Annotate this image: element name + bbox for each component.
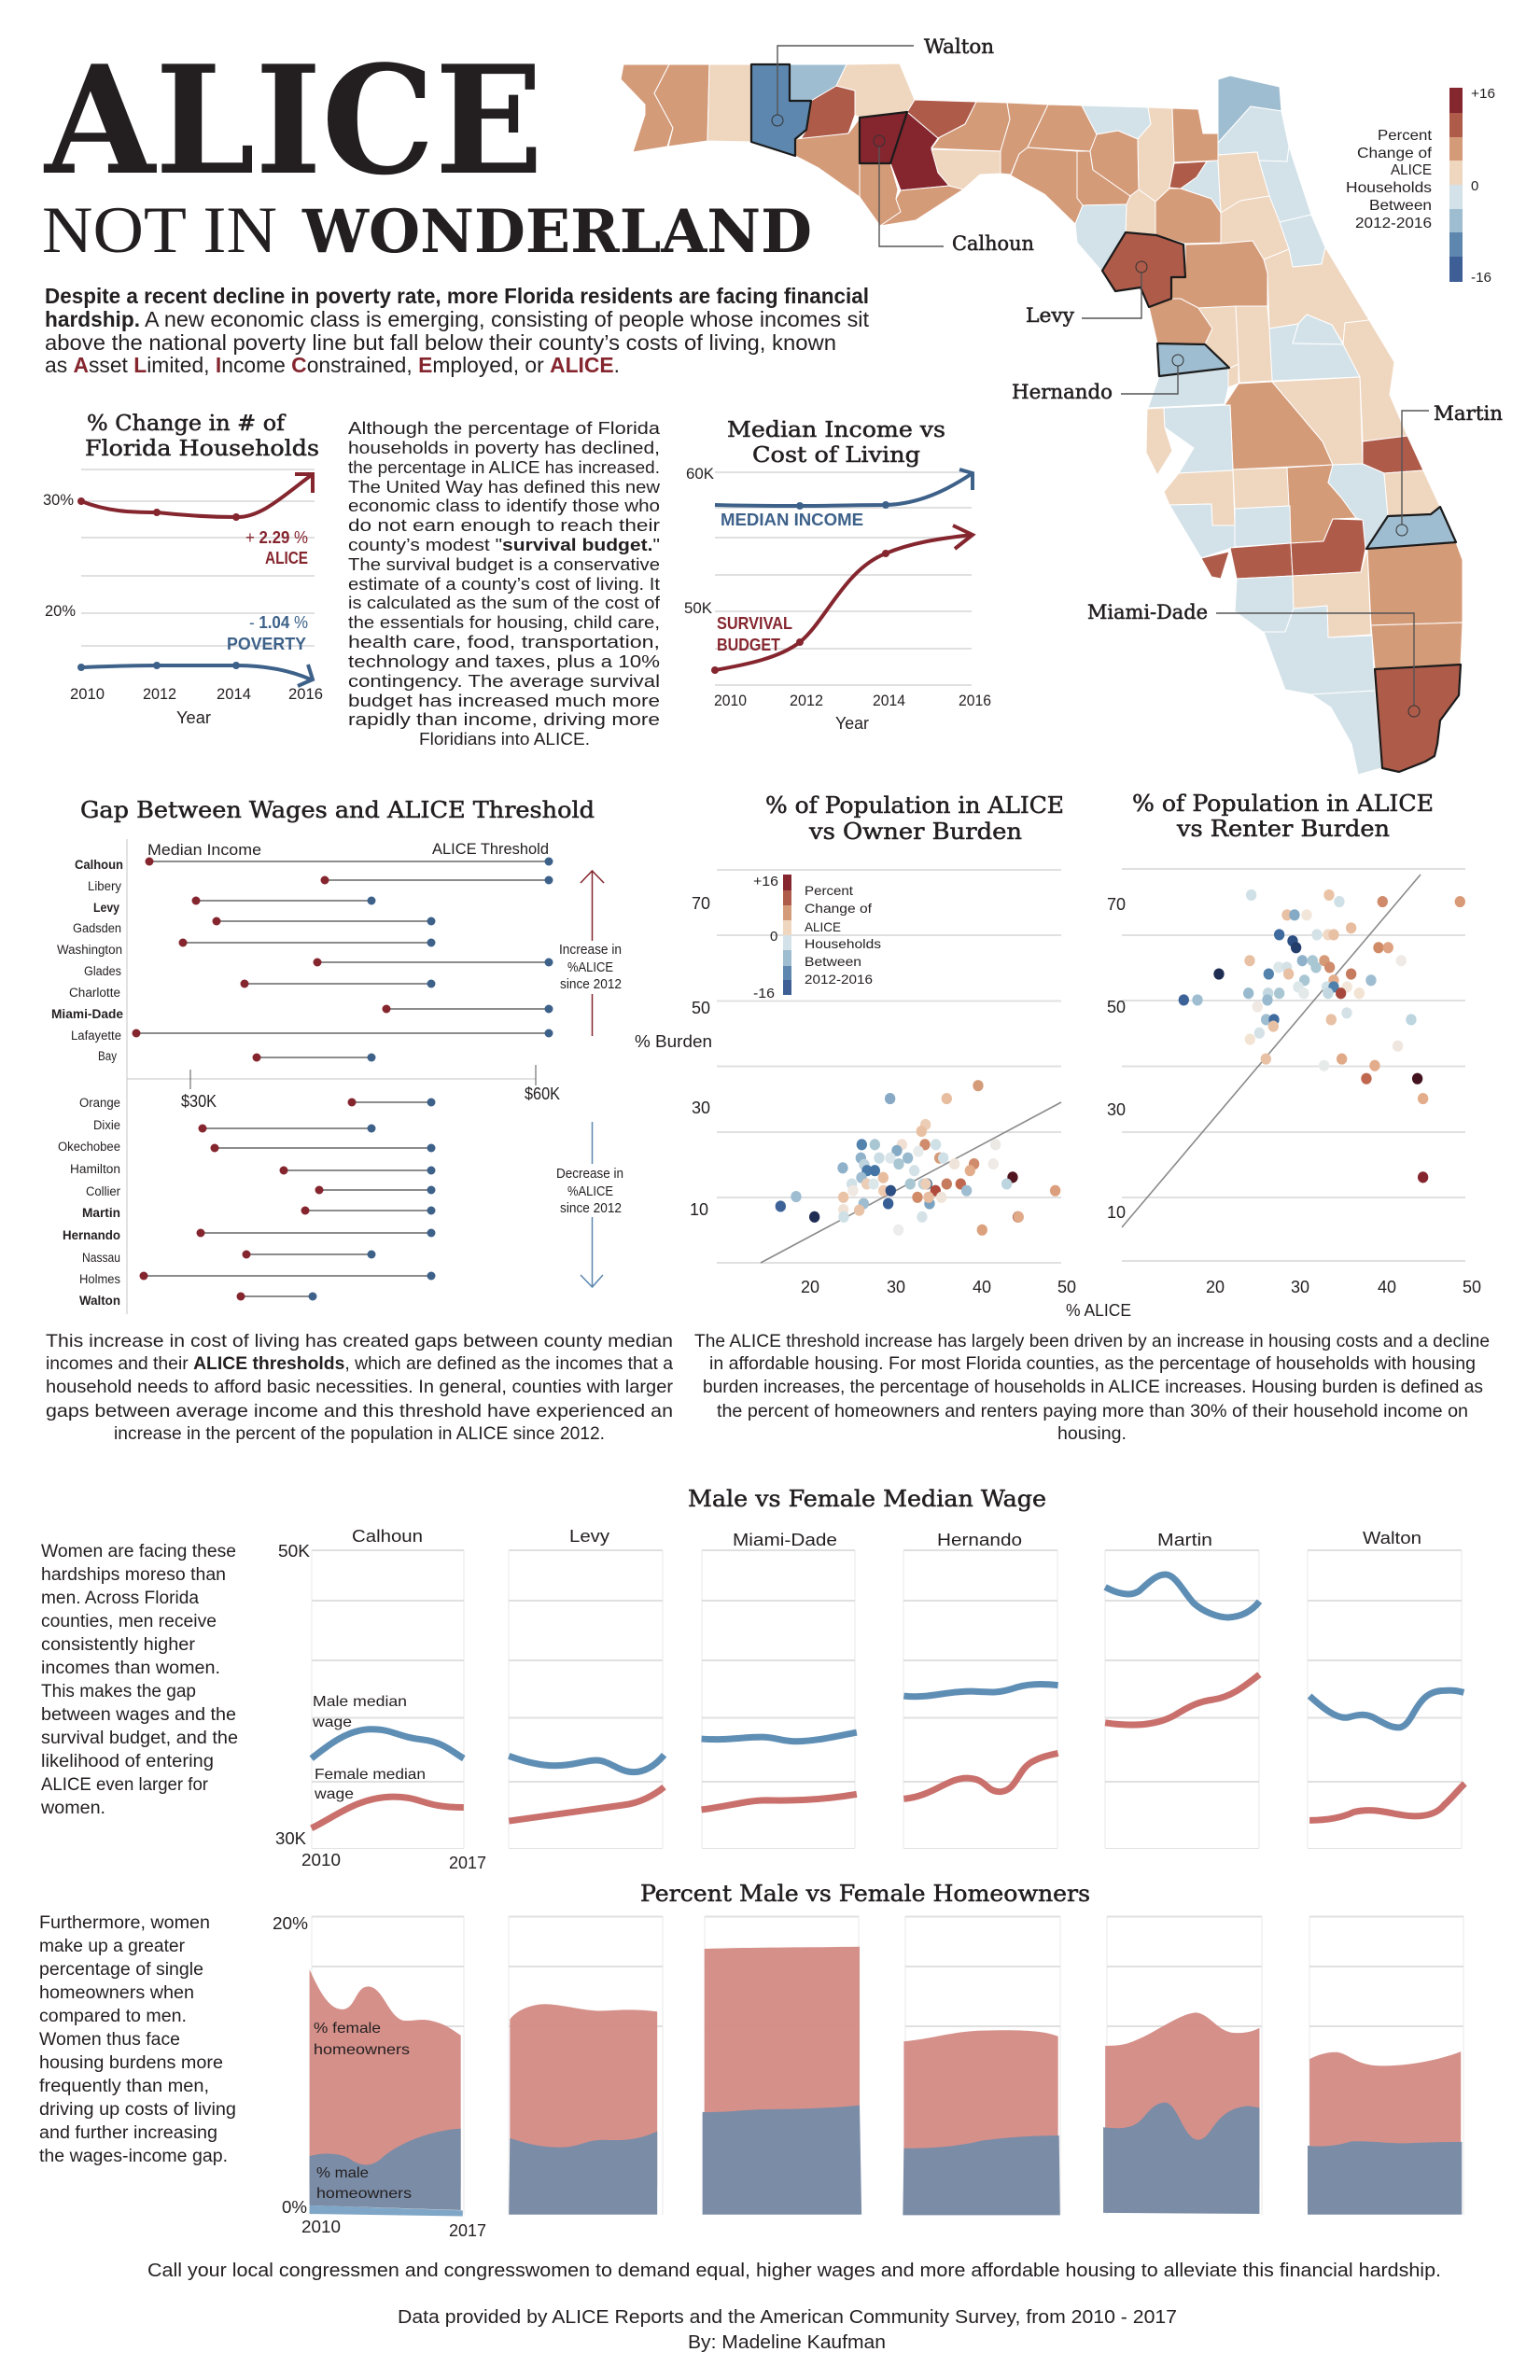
- text block: survival budget explanation: Although the percentage of Florida: [348, 418, 661, 438]
- county labels: Levy: [93, 901, 119, 915]
- text block: women facing hardships: between wages and the: [41, 1705, 236, 1725]
- panel: median income vs cost of living chart: Year: [835, 714, 869, 733]
- axis labels: 20%: [273, 1914, 308, 1933]
- arrow: increase in ALICE: [559, 871, 622, 1036]
- annotation: percent male homeowners: % male: [316, 2165, 369, 2181]
- heading: change in households: [85, 412, 319, 461]
- arrow: increase in ALICE: %ALICE: [567, 959, 613, 975]
- label: survival budget: BUDGET: [717, 636, 780, 654]
- county titles: [352, 1527, 1421, 1549]
- panel: change in households chart: 2014: [217, 685, 251, 703]
- annotation: percent male homeowners: homeowners: [316, 2186, 412, 2202]
- label: median income: MEDIAN INCOME: [721, 511, 863, 529]
- county labels: Bay: [98, 1049, 117, 1063]
- callout: Miami-Dade: Miami-Dade: [1087, 601, 1208, 623]
- intro text block: [45, 284, 870, 377]
- panel: median income vs cost of living chart: 60K: [686, 465, 715, 483]
- text block: women homeowners: Furthermore, women: [39, 1913, 210, 1933]
- county labels: Martin: [82, 1206, 120, 1220]
- title: WONDERLAND: [301, 197, 812, 267]
- heading: median income vs cost of living: [727, 418, 945, 468]
- callout: Calhoun: Calhoun: [952, 232, 1034, 255]
- label: poverty change: [227, 613, 308, 653]
- legend: map colour scale: ALICE: [1391, 162, 1432, 178]
- text block: women facing hardships: incomes than women.: [41, 1659, 220, 1678]
- text block: women facing hardships: consistently higher: [41, 1635, 196, 1655]
- text block: wage gap explanation: increase in the percent of the population in ALICE since 2012.: [114, 1423, 605, 1444]
- county labels: Libery: [88, 879, 121, 893]
- legend: map colour scale: Percent: [1378, 128, 1433, 144]
- dumbbells: counties with increase: [133, 857, 553, 1062]
- text block: survival budget explanation: estimate of a county’s cost of living. It: [348, 574, 660, 594]
- legend: map colour scale: [1346, 86, 1495, 286]
- panel: change in households chart: 20%: [45, 602, 76, 620]
- annotation: female median wage: wage: [314, 1786, 354, 1802]
- line: ALICE share: [79, 474, 313, 519]
- label: poverty change: - 1.04 %: [249, 613, 308, 632]
- heading: owner burden: % of Population in ALICE: [765, 792, 1064, 819]
- county labels: Okechobee: [58, 1140, 120, 1154]
- panel: gap between wages and threshold dumbbell chart: $30K: [181, 1092, 217, 1111]
- wage lines: [312, 1575, 1464, 1828]
- county labels: Miami-Dade: [51, 1007, 123, 1021]
- intro text block: A new economic class is emerging, consisting of people whose incomes sit: [145, 307, 870, 331]
- text block: wage gap explanation: [46, 1331, 674, 1444]
- annotation: percent female homeowners: [314, 2021, 410, 2058]
- text block: housing burden explanation: the percent of homeowners and renters paying more than 30% of their household income on: [717, 1401, 1468, 1421]
- county titles: Miami-Dade: [733, 1531, 837, 1549]
- scatter points: owner burden: [776, 1080, 1060, 1236]
- panel: homeowner area small multiples: [273, 1914, 1463, 2240]
- text block: survival budget explanation: Floridians into ALICE.: [419, 729, 590, 749]
- panel: owner burden scatter plot: 10: [690, 1200, 708, 1219]
- footer: call to action: Call your local congressmen and congresswomen to demand equal, higher wages and more affordable housing to alleviate this financial hardship.: [147, 2261, 1441, 2281]
- panel: owner burden scatter plot: 50: [1057, 1278, 1076, 1296]
- panel: owner burden scatter plot: 20: [801, 1278, 819, 1296]
- title: NOT IN: [42, 194, 277, 267]
- text block: wage gap explanation: household needs to afford basic necessities. In general, counties with larger: [46, 1377, 674, 1397]
- line: median income: [715, 469, 973, 508]
- axis labels: [275, 1542, 486, 1872]
- legend: map colour scale: Households: [1346, 180, 1432, 196]
- legend: scatter colour scale: 2012-2016: [805, 972, 873, 987]
- county labels: Collier: [86, 1184, 120, 1198]
- panel: renter burden scatter plot: 30: [1291, 1278, 1309, 1296]
- text block: women facing hardships: This makes the gap: [41, 1682, 196, 1701]
- text block: wage gap explanation: This increase in cost of living has created gaps between county median: [46, 1331, 673, 1351]
- county labels: Dixie: [93, 1118, 120, 1132]
- heading: renter burden: [1132, 791, 1434, 842]
- text block: women facing hardships: [40, 1542, 238, 1818]
- panel: gap between wages and threshold dumbbell chart: $60K: [525, 1085, 560, 1103]
- county labels: Glades: [84, 964, 121, 978]
- panel: renter burden scatter plot: 20: [1206, 1278, 1225, 1296]
- text block: survival budget explanation: budget has increased much more: [348, 691, 660, 710]
- title: ALICE: [43, 33, 543, 208]
- panel: owner burden scatter plot: 50: [692, 999, 710, 1017]
- text block: women homeowners: Women thus face: [39, 2030, 180, 2050]
- text block: survival budget explanation: households in poverty has declined,: [348, 438, 660, 457]
- panel: gap between wages and threshold dumbbell chart: Median Income: [147, 841, 261, 859]
- text block: housing burden explanation: in affordable housing. For most Florida counties, as the percentage of households with housing: [709, 1353, 1476, 1374]
- panel: change in households chart: 2016: [288, 685, 323, 703]
- annotation: male median wage: wage: [312, 1715, 352, 1730]
- panel: owner burden scatter plot: 30: [887, 1278, 905, 1296]
- panel: owner burden scatter plot: 30: [692, 1099, 710, 1117]
- text block: women facing hardships: likelihood of entering: [41, 1752, 214, 1771]
- text block: women facing hardships: men. Across Florida: [41, 1589, 199, 1608]
- annotation: percent female homeowners: homeowners: [314, 2042, 410, 2058]
- county labels: Hernando: [63, 1228, 120, 1242]
- arrow: increase in ALICE: Increase in: [559, 942, 622, 958]
- legend: map colour scale: Change of: [1357, 146, 1433, 161]
- stacked areas: [310, 1947, 1462, 2217]
- panel: owner burden scatter plot: % ALICE: [1066, 1301, 1131, 1320]
- callout: Walton: Walton: [924, 35, 994, 58]
- county labels: Charlotte: [69, 986, 120, 1000]
- panel: change in households chart: 2010: [70, 685, 105, 703]
- county titles: Walton: [1363, 1529, 1421, 1547]
- panel: gap between wages and threshold dumbbell chart: ALICE Threshold: [432, 840, 549, 858]
- panel: renter burden scatter plot: 40: [1378, 1278, 1396, 1296]
- county labels: Walton: [79, 1294, 120, 1308]
- text block: women facing hardships: hardships moreso than: [41, 1565, 226, 1585]
- callout: Calhoun: [874, 135, 1034, 255]
- callout: Martin: Martin: [1434, 402, 1503, 425]
- legend: map colour scale: +16: [1471, 86, 1495, 102]
- panel: median income vs cost of living chart: 2010: [714, 692, 747, 709]
- heading: male vs female median wage: Male vs Female Median Wage: [688, 1486, 1046, 1512]
- panel: change in households chart: Year: [176, 708, 211, 727]
- text block: wage gap explanation: incomes and their ALICE thresholds, which are defined as the incomes that a: [46, 1353, 673, 1374]
- footer: data source and byline: Data provided by ALICE Reports and the American Community Survey, from 2010 - 2017: [398, 2307, 1177, 2328]
- legend: scatter colour scale: -16: [753, 986, 775, 1001]
- panel: renter burden scatter plot: 30: [1107, 1100, 1126, 1119]
- text block: housing burden explanation: burden increases, the percentage of households in ALICE increases. Housing burden is defined as: [703, 1377, 1483, 1397]
- county titles: Calhoun: [352, 1527, 423, 1546]
- legend: scatter colour scale: ALICE: [805, 919, 841, 934]
- callout: Martin: [1396, 402, 1503, 536]
- text block: women facing hardships: survival budget, and the: [41, 1729, 238, 1748]
- text block: survival budget explanation: is calculated as the sum of the cost of: [348, 593, 661, 612]
- county labels: Washington: [57, 943, 122, 957]
- arrow: decrease in ALICE: Decrease in: [556, 1166, 623, 1182]
- text block: women facing hardships: Women are facing these: [41, 1542, 236, 1561]
- dumbbells: counties with decrease: [140, 1098, 435, 1301]
- panel: renter burden scatter plot: 50: [1107, 998, 1126, 1016]
- footer: data source and byline: By: Madeline Kaufman: [688, 2332, 886, 2353]
- panel: gap between wages and threshold dumbbell chart: [51, 797, 623, 1314]
- text block: women facing hardships: women.: [40, 1799, 105, 1818]
- text block: women homeowners: compared to men.: [39, 2007, 187, 2026]
- intro text block: as Asset Limited, Income Constrained, Employed, or ALICE.: [45, 353, 620, 377]
- county labels: Lafayette: [71, 1029, 121, 1043]
- label: ALICE change: + 2.29 %: [245, 528, 308, 547]
- callout: Levy: Levy: [1026, 304, 1074, 327]
- label: ALICE change: [245, 528, 308, 567]
- annotation: male median wage: [312, 1694, 407, 1730]
- legend: scatter colour scale: Households: [805, 936, 881, 951]
- line: poverty share: [79, 664, 313, 686]
- heading: change in households: Florida Households: [85, 437, 319, 461]
- axis labels: 2017: [449, 2221, 486, 2240]
- panel: owner burden scatter plot: [635, 792, 1131, 1320]
- panel: renter burden scatter plot: [1107, 791, 1481, 1296]
- text block: survival budget explanation: [348, 418, 661, 749]
- label: ALICE change: ALICE: [265, 549, 308, 567]
- intro text block: Despite a recent decline in poverty rate, more Florida residents are facing financial: [45, 284, 869, 308]
- text block: women homeowners: [39, 1913, 236, 2166]
- legend: scatter colour scale: Change of: [805, 901, 872, 916]
- panel: median income vs cost of living chart: 2012: [790, 692, 823, 709]
- text block: women facing hardships: ALICE even larger for: [41, 1775, 209, 1795]
- arrow: decrease in ALICE: [556, 1122, 623, 1287]
- intro text block: hardship.: [45, 307, 140, 331]
- heading: gap between wages and ALICE threshold: Gap Between Wages and ALICE Threshold: [80, 797, 595, 823]
- axis labels: 30K: [275, 1829, 306, 1848]
- arrow: increase in ALICE: since 2012: [560, 976, 622, 992]
- text block: women homeowners: and further increasing: [39, 2123, 217, 2143]
- panel: renter burden scatter plot: 10: [1107, 1203, 1126, 1222]
- text block: housing burden explanation: housing.: [1057, 1423, 1127, 1444]
- text block: survival budget explanation: health care, food, transportation,: [348, 632, 660, 651]
- callout: Levy: [1026, 261, 1147, 327]
- annotation: female median wage: Female median: [315, 1767, 426, 1783]
- legend: scatter colour scale: Percent: [805, 883, 853, 898]
- label: survival budget: [717, 614, 792, 654]
- annotation: percent male homeowners: [316, 2165, 412, 2202]
- panel: median income vs cost of living chart: 50K: [684, 599, 713, 617]
- text block: women homeowners: frequently than men,: [39, 2077, 209, 2096]
- text block: women homeowners: percentage of single: [39, 1960, 203, 1980]
- text block: survival budget explanation: contingency. The average survival: [348, 671, 660, 691]
- text block: survival budget explanation: The survival budget is a conservative: [348, 554, 660, 574]
- intro text block: above the national poverty line but fall below their county’s costs of living, known: [45, 330, 836, 355]
- county titles: Martin: [1157, 1531, 1212, 1549]
- county labels: [51, 858, 123, 1308]
- annotation: percent female homeowners: % female: [314, 2021, 381, 2037]
- text block: wage gap explanation: gaps between average income and this threshold have experienced an: [46, 1401, 673, 1421]
- text block: survival budget explanation: county’s modest " survival budget. ": [348, 535, 660, 554]
- annotation: female median wage: [314, 1767, 426, 1802]
- map: Florida counties choropleth: [621, 63, 1463, 775]
- text block: women homeowners: homeowners when: [39, 1983, 194, 2003]
- callout: Hernando: [1012, 355, 1183, 403]
- label: survival budget: SURVIVAL: [717, 614, 792, 633]
- county labels: Calhoun: [75, 858, 123, 872]
- callout: Walton: [772, 35, 994, 126]
- heading: renter burden: % of Population in ALICE: [1132, 791, 1434, 817]
- text block: survival budget explanation: do not earn enough to reach their: [348, 515, 660, 535]
- panel: change in households chart: 2012: [143, 685, 176, 703]
- axis labels: 2010: [301, 1851, 341, 1869]
- text block: survival budget explanation: economic class to identify those who: [348, 496, 660, 515]
- text block: women homeowners: housing burdens more: [39, 2053, 223, 2073]
- text block: women homeowners: driving up costs of living: [39, 2100, 236, 2120]
- panel: owner burden scatter plot: 70: [692, 894, 710, 913]
- text block: housing burden explanation: The ALICE threshold increase has largely been driven by an increase in housing costs and a decline: [694, 1331, 1490, 1351]
- legend: map colour scale: Between: [1369, 198, 1432, 214]
- heading: median income vs cost of living: Cost of Living: [752, 443, 920, 468]
- scatter points: renter burden: [1179, 889, 1465, 1183]
- text block: survival budget explanation: technology and taxes, plus a 10%: [348, 651, 660, 671]
- county labels: Holmes: [79, 1272, 120, 1286]
- callout: Miami-Dade: [1087, 601, 1420, 717]
- heading: change in households: % Change in # of: [87, 412, 287, 436]
- heading: percent male vs female homeowners: Percent Male vs Female Homeowners: [640, 1881, 1090, 1907]
- heading: owner burden: vs Owner Burden: [808, 819, 1022, 845]
- county labels: Nassau: [82, 1251, 120, 1265]
- annotation: male median wage: Male median: [313, 1694, 407, 1710]
- axis labels: 2017: [449, 1854, 486, 1872]
- legend: scatter colour scale: +16: [753, 874, 778, 889]
- legend: map colour scale: 0: [1471, 178, 1478, 194]
- axis labels: 2010: [301, 2218, 341, 2236]
- legend: map colour scale: 2012-2016: [1355, 216, 1432, 231]
- panel: change in households chart: 30%: [43, 491, 74, 509]
- county labels: Gadsden: [73, 921, 121, 935]
- text block: survival budget explanation: the percentage in ALICE has increased.: [348, 457, 660, 477]
- panel: male vs female wage small multiples: [275, 1527, 1464, 1872]
- county titles: Hernando: [937, 1531, 1022, 1549]
- panel: median income vs cost of living chart: [684, 418, 991, 733]
- text block: women facing hardships: counties, men receive: [41, 1612, 217, 1631]
- panel: median income vs cost of living chart: 2016: [959, 692, 991, 709]
- county labels: Hamilton: [70, 1162, 120, 1176]
- arrow: decrease in ALICE: %ALICE: [567, 1183, 613, 1199]
- panel: owner burden scatter plot: 40: [973, 1278, 991, 1296]
- panel: median income vs cost of living chart: 2014: [873, 692, 905, 709]
- legend: map colour scale: -16: [1471, 270, 1491, 286]
- text block: survival budget explanation: rapidly than income, driving more: [348, 709, 660, 729]
- text block: survival budget explanation: The United Way has defined this new: [348, 477, 661, 497]
- text block: women homeowners: make up a greater: [39, 1937, 186, 1956]
- county titles: Levy: [569, 1527, 609, 1546]
- heading: owner burden: [765, 792, 1064, 845]
- heading: median income vs cost of living: Median Income vs: [727, 418, 945, 442]
- map: highlighted counties: [751, 64, 1461, 772]
- callout: Hernando: Hernando: [1012, 381, 1113, 403]
- text block: survival budget explanation: the essentials for housing, child care,: [348, 612, 660, 632]
- panel: change in households chart: [43, 412, 323, 727]
- legend: scatter colour scale: [753, 874, 881, 1001]
- text block: women homeowners: the wages-income gap.: [39, 2147, 228, 2166]
- legend: scatter colour scale: 0: [770, 929, 777, 945]
- title: [42, 33, 812, 267]
- legend: scatter colour scale: Between: [805, 954, 861, 969]
- county labels: Orange: [79, 1096, 120, 1110]
- text block: housing burden explanation: [694, 1331, 1490, 1444]
- panel: owner burden scatter plot: % Burden: [635, 1032, 712, 1051]
- axis labels: 50K: [278, 1542, 310, 1561]
- heading: renter burden: vs Renter Burden: [1176, 816, 1390, 842]
- footer: data source and byline: [398, 2307, 1177, 2353]
- axis labels: 0%: [282, 2198, 307, 2217]
- panel: renter burden scatter plot: 70: [1107, 895, 1126, 914]
- axis labels: [273, 1914, 486, 2240]
- label: poverty change: POVERTY: [227, 635, 306, 653]
- line: survival budget: [713, 525, 973, 672]
- panel: renter burden scatter plot: 50: [1463, 1278, 1481, 1296]
- arrow: decrease in ALICE: since 2012: [560, 1200, 622, 1216]
